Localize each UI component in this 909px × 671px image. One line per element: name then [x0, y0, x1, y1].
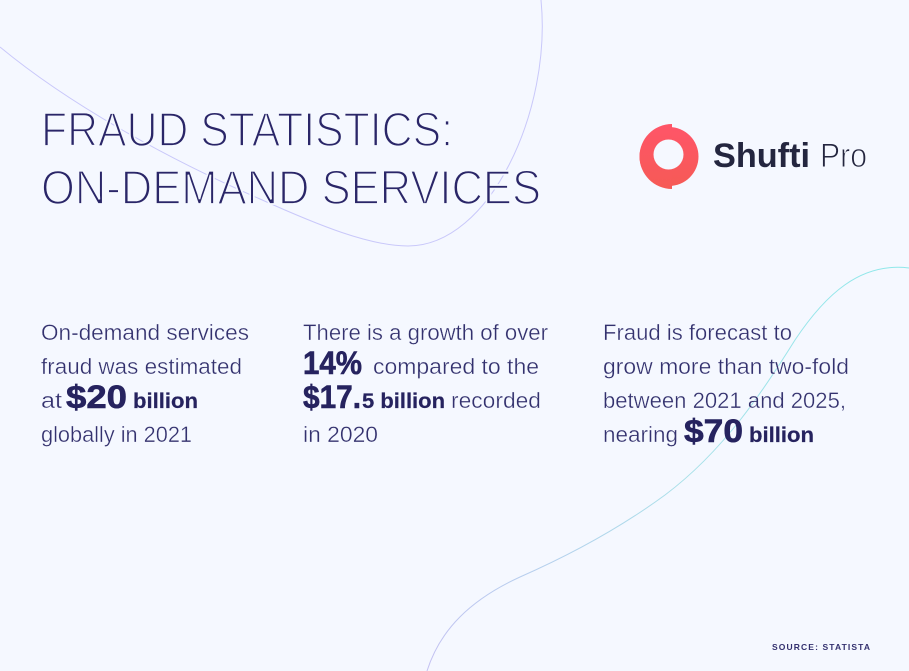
text block: 2025 forecast: grow more than two-fold [603, 354, 849, 379]
title: FRAUD STATISTICS: [41, 104, 453, 157]
text block: growth since 2020: There is a growth of over [303, 320, 548, 345]
text block: growth since 2020: compared to the [373, 354, 539, 379]
text block: 2025 forecast: Fraud is forecast to [603, 320, 792, 345]
text block: growth since 2020 [303, 320, 548, 447]
title: ON-DEMAND SERVICES [41, 162, 541, 215]
decorative curve: purple [0, 0, 542, 246]
text block: growth since 2020: in 2020 [303, 422, 378, 447]
title [41, 104, 541, 215]
text block: growth since 2020: 5 billion [362, 389, 445, 413]
text block: 2021 estimate: $20 [66, 379, 127, 415]
text block: 2025 forecast [603, 320, 849, 449]
text block: 2021 estimate [41, 320, 249, 447]
text block: 2021 estimate: at [41, 388, 63, 413]
text block: 2025 forecast: between 2021 and 2025, [603, 388, 846, 413]
text block: 2025 forecast: $70 [684, 413, 743, 449]
text block: 2021 estimate: On-demand services [41, 320, 249, 345]
logo wordmark [713, 137, 867, 175]
text block: growth since 2020: $17. [303, 379, 361, 415]
logo wordmark: Pro [820, 137, 867, 175]
icon: red ring [640, 124, 698, 189]
text block: 2025 forecast: nearing [603, 422, 678, 447]
logo: Shufti Pro [640, 124, 867, 189]
text block: growth since 2020: 14% [303, 345, 362, 381]
logo wordmark: Shufti [713, 137, 810, 175]
text block: 2021 estimate: fraud was estimated [41, 354, 242, 379]
decorative curve: teal [427, 267, 909, 671]
text block: 2021 estimate: billion [133, 389, 198, 413]
text block: 2021 estimate: globally in 2021 [41, 422, 192, 447]
text block: 2025 forecast: billion [749, 423, 814, 447]
source note: SOURCE: STATISTA [772, 642, 870, 652]
text block: growth since 2020: recorded [451, 388, 541, 413]
